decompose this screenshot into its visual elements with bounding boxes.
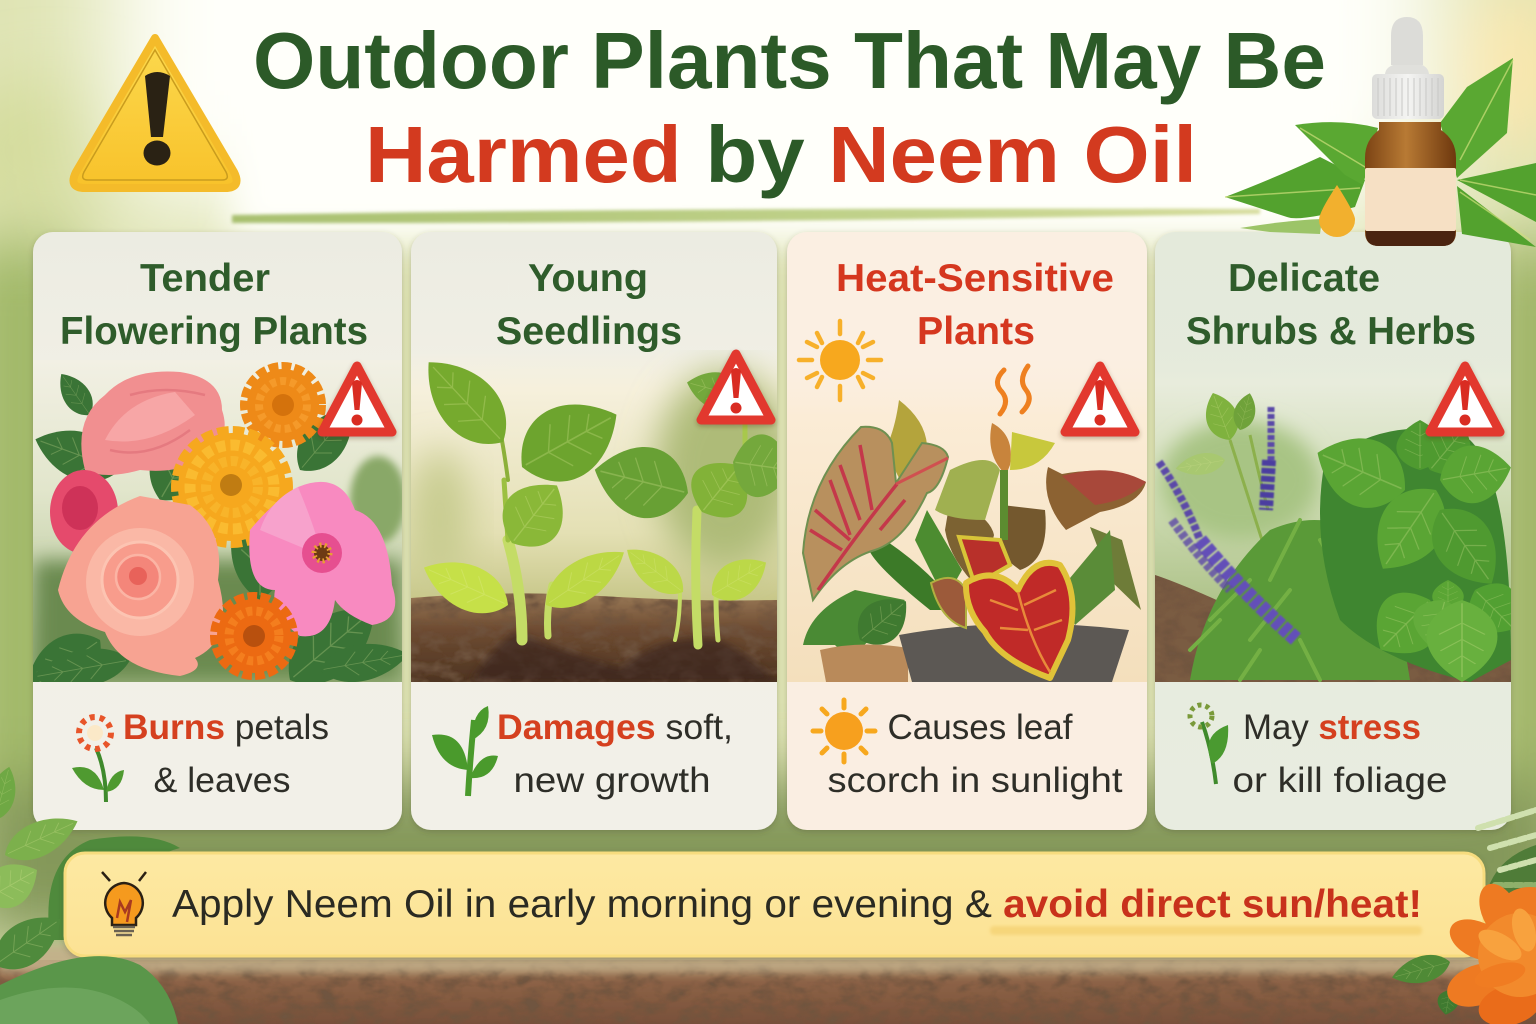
icon: small sun xyxy=(813,700,875,762)
deep orange marigold xyxy=(217,599,291,673)
foreground foliage left xyxy=(0,763,178,1024)
marigold petals xyxy=(1441,877,1536,1024)
heading: Flowering Plants xyxy=(60,310,368,353)
tip text: Apply Neem Oil in early morning or evening & avoid direct sun/heat! xyxy=(172,883,1422,926)
title: Harmed by Neem Oil xyxy=(365,110,1197,199)
foreground foliage and marigold right xyxy=(1389,810,1536,1024)
description: scorch in sunlight xyxy=(828,761,1123,800)
icon: warning triangle xyxy=(73,38,237,188)
icon: warning xyxy=(1065,366,1135,432)
photo: heat plants xyxy=(787,400,1147,682)
heading: Shrubs & Herbs xyxy=(1186,310,1476,353)
description: Damages soft, xyxy=(497,708,732,747)
oil drop xyxy=(1319,185,1355,237)
description: or kill foliage xyxy=(1232,761,1448,800)
photo: seedlings xyxy=(408,343,797,682)
photo: flowers xyxy=(33,362,402,682)
icon: warning xyxy=(701,354,771,420)
description: May stress xyxy=(1243,708,1422,747)
icon: warning xyxy=(322,366,392,432)
icon: herb xyxy=(1190,705,1228,784)
heading: Heat-Sensitive xyxy=(836,257,1114,300)
heading: Tender xyxy=(140,257,270,300)
panel: delicate shrubs and herbs xyxy=(1155,232,1532,830)
icon: sprout xyxy=(432,706,498,796)
bottle glass xyxy=(1365,122,1456,246)
heading: Seedlings xyxy=(496,310,682,353)
description: new growth xyxy=(514,761,710,800)
icon: flower xyxy=(72,717,124,802)
icon: light bulb xyxy=(102,872,146,935)
title underline xyxy=(232,209,1260,223)
description: & leaves xyxy=(154,761,290,800)
icon: warning xyxy=(1430,366,1500,432)
panel: young seedlings xyxy=(408,232,797,830)
orange marigold xyxy=(247,369,319,441)
highlight under warning text xyxy=(990,926,1422,935)
panel: tender flowering plants xyxy=(11,232,412,830)
heading: Plants xyxy=(917,310,1035,353)
panel: heat-sensitive plants xyxy=(787,232,1147,830)
heading: Young xyxy=(528,257,648,300)
yellow marigold xyxy=(178,433,286,541)
foliage behind callout xyxy=(48,836,1536,940)
description: Causes leaf xyxy=(888,708,1073,747)
heading: Delicate xyxy=(1228,257,1380,300)
photo: herbs xyxy=(1155,393,1511,682)
callout: application tip xyxy=(65,853,1484,956)
description: Burns petals xyxy=(123,708,328,747)
neem oil bottle with leaves xyxy=(1225,17,1536,247)
icon: sun xyxy=(799,321,881,400)
icon: heat waves xyxy=(997,366,1029,414)
bottle cap xyxy=(1372,17,1444,119)
title xyxy=(253,16,1326,199)
title: Outdoor Plants That May Be xyxy=(253,16,1326,105)
